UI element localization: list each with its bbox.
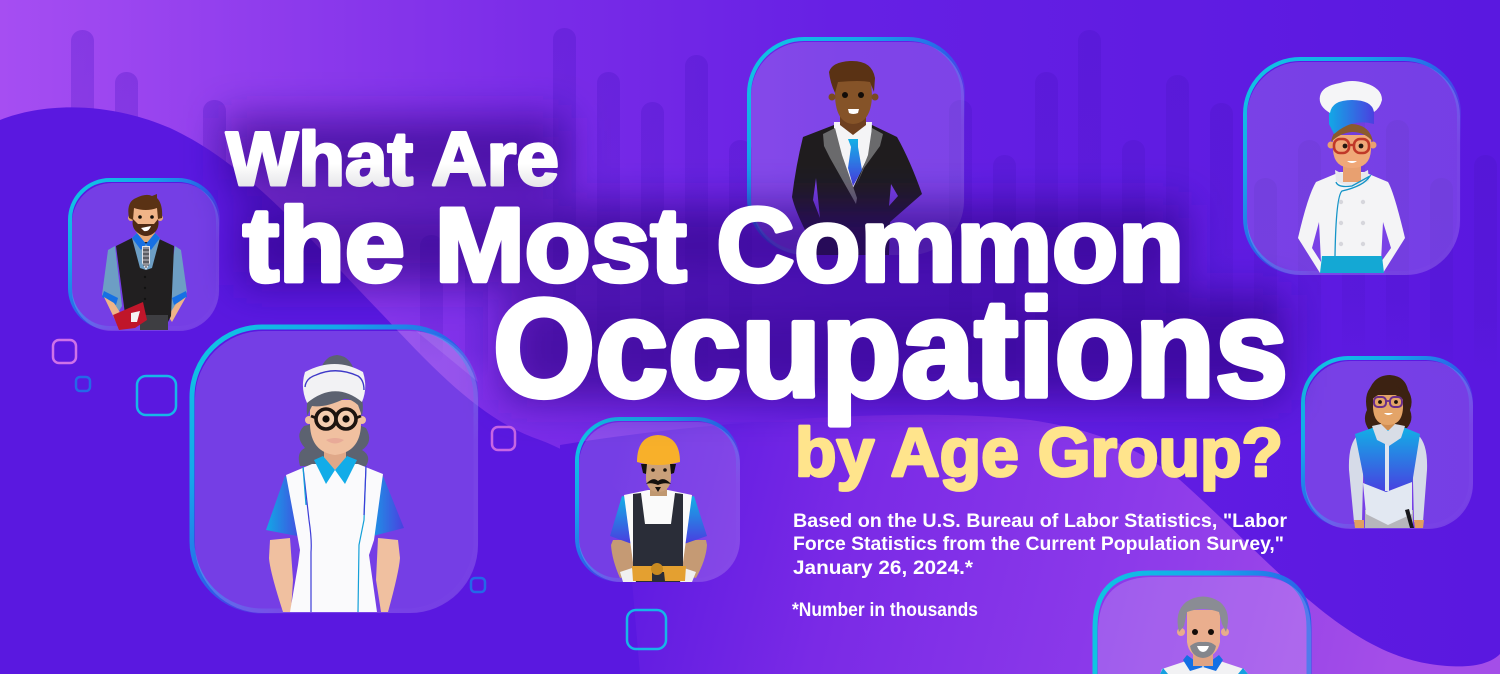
panel: nurse <box>192 327 478 613</box>
background bar pattern <box>71 28 1497 395</box>
figure: man in suit <box>792 61 922 255</box>
title <box>226 117 1288 426</box>
panel: suit professional <box>749 39 964 255</box>
figure: nurse <box>266 355 404 612</box>
title line: What Are: What Are <box>226 117 559 202</box>
figure: chef <box>1298 81 1405 273</box>
subtitle: by Age Group?: by Age Group? <box>795 414 1283 491</box>
card fold highlight <box>416 331 478 382</box>
source text block: Based on the U.S. Bureau of Labor Statistics, "Labor <box>793 511 1288 532</box>
lower light wave band <box>560 415 1500 674</box>
panel: chef <box>1245 59 1460 275</box>
title line: the Most Common: the Most Common <box>243 187 1184 304</box>
title line: Occupations: Occupations <box>493 271 1288 426</box>
footnote: *Number in thousands <box>792 600 978 621</box>
panel: teacher <box>70 180 219 331</box>
figure: woman with glasses <box>1349 375 1427 528</box>
source text block: Force Statistics from the Current Population Survey," <box>793 534 1284 555</box>
title dark glow <box>225 118 1285 400</box>
panel: older man <box>1095 573 1311 674</box>
panel: construction worker <box>577 419 740 582</box>
source text block: January 26, 2024.* <box>793 558 974 579</box>
figure: construction worker <box>610 435 707 582</box>
panel: woman with apron <box>1303 358 1473 529</box>
source text block <box>793 511 1288 579</box>
decorative rounded squares <box>53 340 666 649</box>
figure: teacher with book <box>102 194 187 330</box>
figure: older man <box>1160 596 1248 674</box>
left dark wave shape <box>0 107 640 674</box>
